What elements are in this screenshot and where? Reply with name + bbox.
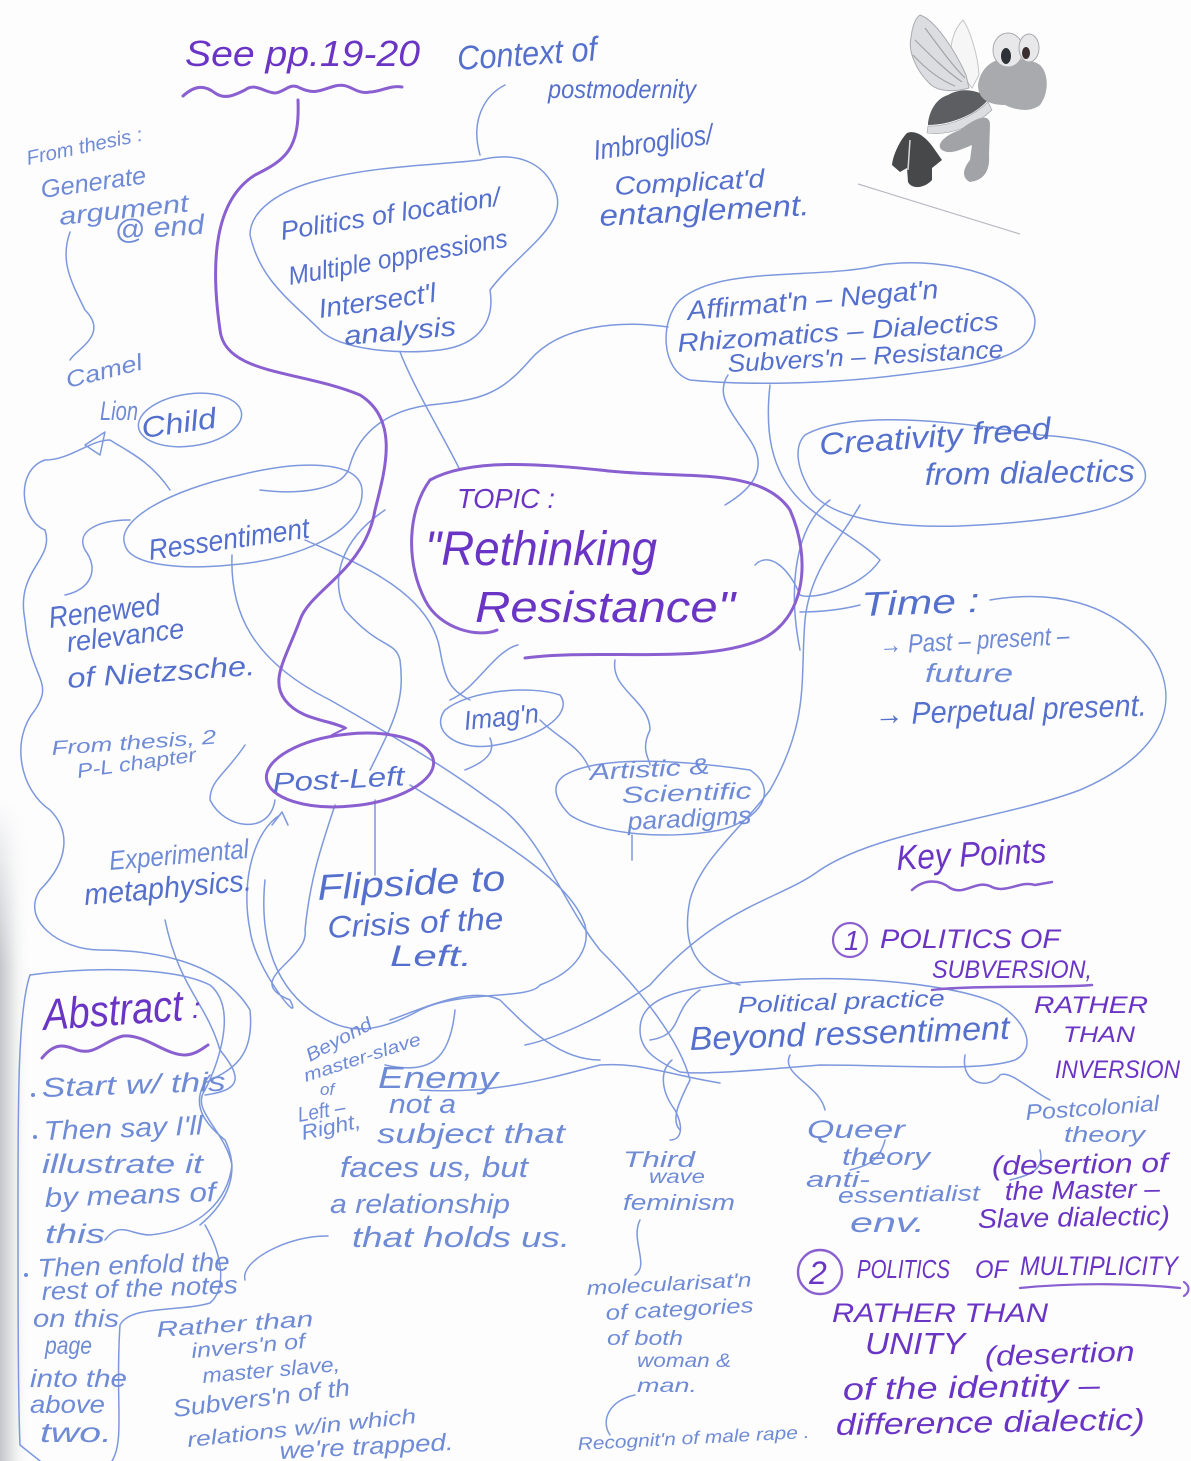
key point 2: politics of multiplicity: RATHER THAN bbox=[832, 1298, 1049, 1328]
note: enemy not a subject bbox=[330, 1060, 570, 1254]
note: artistic and scientific paradigms bubble: Artistic & bbox=[586, 753, 710, 785]
note: from thesis generate argument: Generate bbox=[39, 161, 148, 204]
note: affirmation negation bubble: Subvers'n – Resistance bbox=[727, 336, 1004, 378]
abstract panel: page bbox=[44, 1332, 92, 1360]
note: politics of location bubble bbox=[250, 157, 558, 352]
note: affirmation negation bubble: Affirmat'n – Negat'n bbox=[684, 274, 940, 326]
note: context of postmodernity bbox=[456, 30, 810, 233]
note: beyond master-slave of left-right bbox=[296, 1013, 423, 1145]
abstract panel: two. bbox=[40, 1417, 112, 1448]
abstract panel: Start w/ this bbox=[41, 1067, 226, 1103]
key point 1 detail: desertion of master-slave dialectic bbox=[978, 1148, 1171, 1234]
note: experimental metaphysics: Experimental bbox=[108, 834, 251, 876]
abstract panel: Abstract bbox=[39, 981, 186, 1040]
note: ressentiment bubble bbox=[124, 465, 362, 567]
note: flipside to crisis of the left: Flipside to bbox=[316, 857, 506, 908]
note: image bubble bbox=[441, 690, 563, 747]
note: beyond master-slave of left-right: master-slave bbox=[301, 1029, 423, 1086]
note: postcolonial theory bbox=[1025, 1091, 1161, 1147]
note: third wave feminism: feminism bbox=[623, 1190, 735, 1215]
abstract panel: this bbox=[45, 1219, 105, 1249]
note: queer theory: essentialist bbox=[838, 1181, 981, 1208]
note: time: Time : bbox=[861, 582, 980, 624]
topic bubble: Rethinking Resistance: Resistance" bbox=[475, 583, 738, 632]
key point 1 detail: desertion of master-slave dialectic: the Master – bbox=[1005, 1173, 1161, 1206]
note: politics of location bubble: analysis bbox=[343, 311, 457, 351]
topic bubble: Rethinking Resistance: TOPIC : bbox=[457, 483, 555, 514]
abstract panel: by means of bbox=[44, 1177, 219, 1213]
note: molecularisation of categories bbox=[586, 1269, 755, 1397]
abstract panel: into the bbox=[30, 1365, 127, 1393]
note: recognition of male rape: Recognit'n of male rape . bbox=[577, 1422, 810, 1454]
key point 1 detail: desertion of master-slave dialectic: (desertion of bbox=[992, 1148, 1171, 1181]
note: from thesis P-L chapter: P-L chapter bbox=[76, 744, 199, 783]
note: context of postmodernity: entanglement. bbox=[599, 189, 810, 233]
post-left bubble: Post-Left bbox=[272, 761, 407, 798]
note: politics of location bubble: Multiple oppressions bbox=[286, 223, 510, 291]
note: queer theory: Queer bbox=[807, 1116, 907, 1144]
key point 2: politics of multiplicity: OF bbox=[975, 1256, 1010, 1284]
note: politics of location bubble: Intersect'l bbox=[317, 278, 439, 324]
back wing bbox=[951, 20, 979, 88]
note: beyond master-slave of left-right: of bbox=[320, 1080, 336, 1099]
note: postcolonial theory: Postcolonial bbox=[1025, 1091, 1161, 1125]
key point 1: politics of subversion: THAN bbox=[1063, 1022, 1135, 1047]
note: enemy not a subject: a relationship bbox=[330, 1189, 510, 1219]
note: rather than inversion of master-slave: Subvers'n of th bbox=[171, 1374, 351, 1423]
shell bbox=[928, 90, 988, 125]
head bbox=[978, 59, 1047, 110]
abstract panel bbox=[18, 970, 238, 1461]
note: postcolonial theory: theory bbox=[1064, 1122, 1148, 1147]
note: rather than inversion of master-slave: master slave, bbox=[201, 1353, 341, 1388]
note: molecularisation of categories: man. bbox=[637, 1376, 697, 1397]
front wing bbox=[910, 15, 969, 91]
note: camel lion child bbox=[63, 349, 245, 455]
abstract panel: Then say I'll bbox=[43, 1110, 204, 1146]
topic bubble: Rethinking Resistance bbox=[412, 464, 802, 658]
note: enemy not a subject: not a bbox=[389, 1089, 456, 1119]
note: molecularisation of categories: of categories bbox=[605, 1294, 755, 1325]
note: from thesis generate argument: argument bbox=[58, 189, 191, 231]
note: enemy not a subject: Enemy bbox=[378, 1060, 501, 1095]
icon: flying turtle bbox=[858, 15, 1047, 234]
key point 1: politics of subversion: POLITICS OF bbox=[880, 924, 1062, 954]
note: context of postmodernity: Complicat'd bbox=[614, 163, 767, 201]
note: creativity freed from dialectics bbox=[798, 411, 1145, 526]
key point 2: politics of multiplicity: of the identity – bbox=[843, 1368, 1101, 1407]
abstract panel: : bbox=[192, 992, 200, 1025]
key point 1: politics of subversion: SUBVERSION, bbox=[932, 956, 1092, 984]
key point 1 detail: desertion of master-slave dialectic: Slave dialectic) bbox=[978, 1201, 1170, 1234]
note: flipside to crisis of the left: Left. bbox=[390, 940, 472, 973]
note: artistic and scientific paradigms bubble: paradigms bbox=[626, 802, 752, 836]
note: politics of location bubble: Politics of location/ bbox=[278, 181, 505, 246]
note: queer theory: env. bbox=[850, 1207, 925, 1238]
note: camel lion child: Child bbox=[140, 403, 219, 445]
title: See pp. 19-20 bbox=[183, 33, 420, 96]
key point 1: politics of subversion: RATHER bbox=[1034, 992, 1148, 1019]
note: rather than inversion of master-slave: relations w/in which bbox=[186, 1405, 417, 1452]
key point 1: politics of subversion bbox=[833, 923, 1181, 1084]
note: beyond master-slave of left-right: Right, bbox=[299, 1110, 363, 1145]
note: context of postmodernity: postmodernity bbox=[547, 74, 698, 104]
note: rather than inversion of master-slave: invers'n of bbox=[190, 1330, 309, 1363]
note: molecularisation of categories: of both bbox=[607, 1328, 683, 1350]
note: context of postmodernity: Imbroglios/ bbox=[592, 118, 717, 166]
note: time: future bbox=[925, 658, 1013, 688]
note: experimental metaphysics: metaphysics. bbox=[83, 864, 253, 912]
note: from thesis P-L chapter: From thesis, 2 bbox=[51, 727, 217, 760]
note: rather than inversion of master-slave bbox=[156, 1306, 454, 1461]
note: rather than inversion of master-slave: Rather than bbox=[156, 1306, 314, 1342]
note: context of postmodernity: Context of bbox=[456, 30, 601, 78]
key point 2: politics of multiplicity: (desertion bbox=[984, 1336, 1135, 1372]
note: third wave feminism bbox=[623, 1147, 735, 1215]
abstract panel: above bbox=[30, 1391, 105, 1419]
note: camel lion child: Camel bbox=[63, 349, 146, 393]
note: political practice beyond ressentiment: Political practice bbox=[737, 985, 945, 1018]
note: political practice beyond ressentiment bbox=[689, 985, 1012, 1057]
note: third wave feminism: Third bbox=[623, 1147, 696, 1172]
note: camel lion child: Lion bbox=[100, 396, 138, 426]
note: molecularisation of categories: molecularisat'n bbox=[586, 1269, 752, 1300]
note: from thesis generate argument bbox=[24, 124, 207, 360]
key point 1: politics of subversion: INVERSION bbox=[1055, 1056, 1181, 1084]
key point 2: politics of multiplicity: difference dialectic) bbox=[836, 1404, 1145, 1442]
abstract panel: Then enfold the bbox=[37, 1246, 230, 1283]
note: enemy not a subject: subject that bbox=[377, 1118, 567, 1149]
note: renewed relevance of Nietzsche bbox=[47, 588, 256, 694]
note: creativity freed from dialectics: from dialectics bbox=[925, 453, 1135, 492]
key point 2: politics of multiplicity bbox=[798, 1250, 1188, 1442]
note: enemy not a subject: that holds us. bbox=[352, 1222, 570, 1254]
note: from thesis generate argument: @ end bbox=[113, 209, 207, 246]
note: beyond master-slave of left-right: Left – bbox=[296, 1096, 347, 1127]
title: See pp. 19-20: See pp.19-20 bbox=[185, 33, 420, 74]
abstract panel: on this bbox=[33, 1305, 119, 1333]
note: affirmation negation bubble: Rhizomatics – Dialectics bbox=[676, 306, 1000, 358]
note: from thesis generate argument: From thesis : bbox=[24, 124, 144, 170]
note: enemy not a subject: faces us, but bbox=[340, 1152, 530, 1184]
note: ressentiment bubble: Ressentiment bbox=[147, 512, 313, 567]
note: flipside to crisis of the left bbox=[316, 857, 506, 973]
note: artistic and scientific paradigms bubble: Scientific bbox=[621, 777, 753, 808]
thick purple link from page reference to Post-Left bbox=[216, 100, 386, 728]
note: queer theory: anti- bbox=[806, 1167, 870, 1192]
key point 2: politics of multiplicity: POLITICS bbox=[857, 1254, 951, 1284]
note: time: → Perpetual present. bbox=[874, 688, 1147, 732]
note: creativity freed from dialectics: Creativity freed bbox=[818, 411, 1054, 462]
key point 1: politics of subversion: 1 bbox=[844, 925, 860, 956]
key points heading: Key Points bbox=[895, 831, 1047, 878]
note: renewed relevance of Nietzsche: of Nietzsche. bbox=[66, 650, 256, 694]
note: affirmation negation bubble bbox=[666, 263, 1035, 383]
key point 2: politics of multiplicity: UNITY bbox=[865, 1326, 967, 1361]
abstract panel: rest of the notes bbox=[41, 1271, 238, 1306]
key point 2: politics of multiplicity: 2 bbox=[808, 1255, 827, 1291]
note: queer theory bbox=[806, 1116, 981, 1238]
arm and body bbox=[940, 118, 990, 182]
note: renewed relevance of Nietzsche: relevance bbox=[65, 613, 186, 658]
note: time: → Past – present – bbox=[879, 620, 1071, 660]
boots bbox=[892, 132, 942, 187]
note: molecularisation of categories: woman & bbox=[637, 1351, 731, 1372]
post-left bubble bbox=[263, 722, 437, 825]
note: experimental metaphysics bbox=[83, 834, 253, 912]
note: image bubble: Imag'n bbox=[462, 698, 540, 736]
note: third wave feminism: wave bbox=[649, 1167, 705, 1188]
note: political practice beyond ressentiment: Beyond ressentiment bbox=[689, 1009, 1012, 1057]
note: renewed relevance of Nietzsche: Renewed bbox=[47, 588, 163, 635]
abstract panel: illustrate it bbox=[42, 1149, 205, 1179]
note: beyond master-slave of left-right: Beyond bbox=[302, 1013, 377, 1066]
topic bubble: Rethinking Resistance: "Rethinking bbox=[425, 523, 657, 576]
note: from thesis P-L chapter bbox=[51, 727, 217, 783]
note: artistic and scientific paradigms bubble bbox=[556, 753, 764, 836]
note: queer theory: theory bbox=[842, 1144, 933, 1171]
note: flipside to crisis of the left: Crisis of the bbox=[327, 901, 504, 945]
note: time bbox=[861, 582, 1147, 732]
